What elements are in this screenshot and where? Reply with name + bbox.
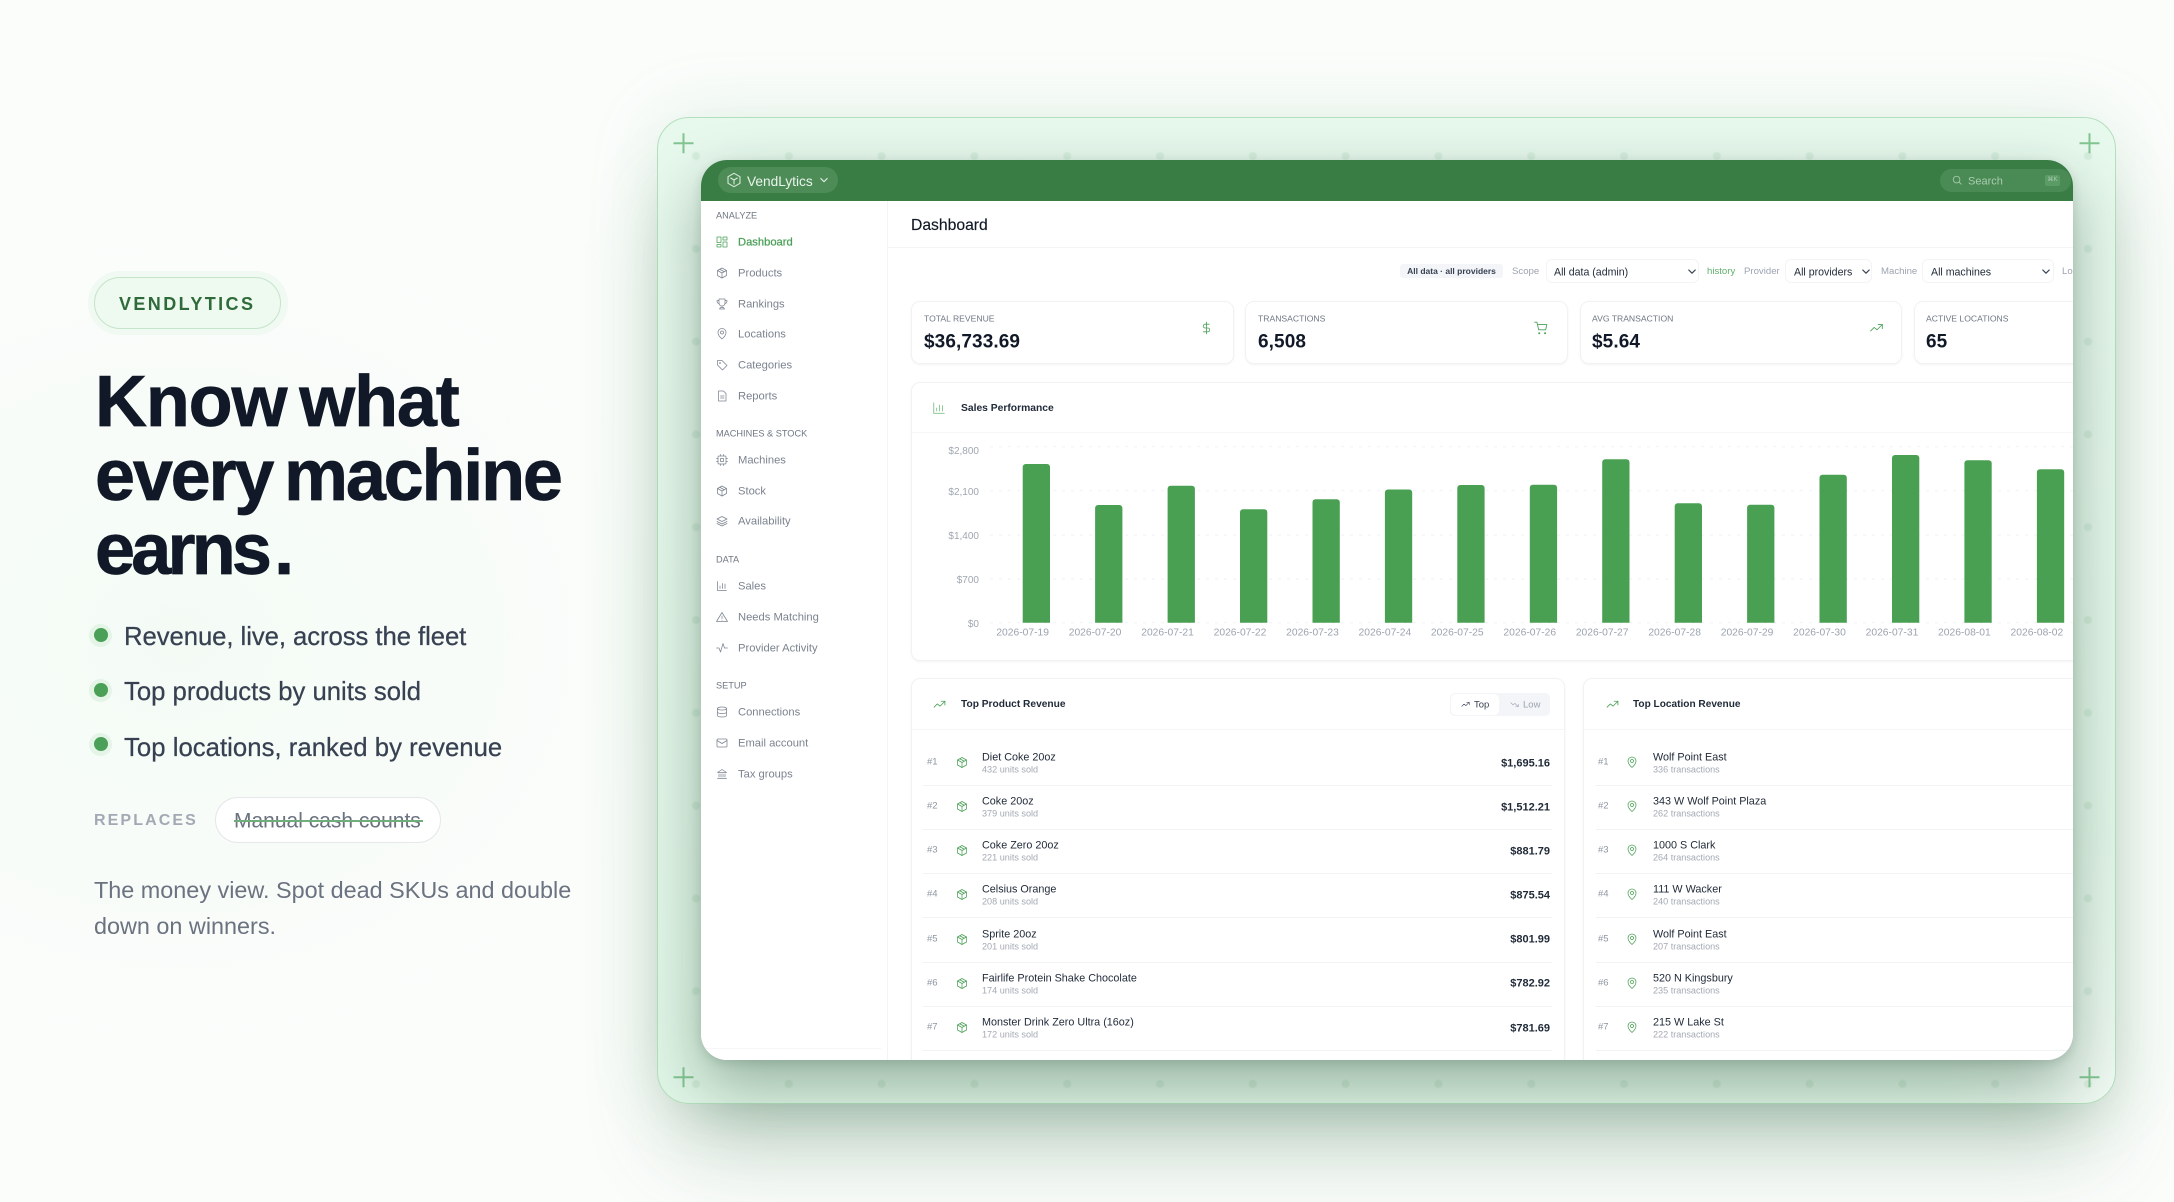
location row 6: 520 N Kingsbury <box>1653 972 1733 984</box>
panel: app window <box>701 160 2073 1060</box>
bar chart: $2,800 <box>948 446 979 457</box>
bar chart: 2026-07-22 <box>1214 628 1267 638</box>
product row 5: 201 units sold <box>982 941 1038 951</box>
KPI: transactions: TRANSACTIONS <box>1258 314 1325 324</box>
icon: trend <box>1606 700 1618 708</box>
nav section: data: Provider Activity <box>738 642 818 654</box>
bar chart: 2026-08-01 <box>1938 628 1991 638</box>
scope chip: All data · all providers <box>1407 266 1496 276</box>
nav section: analyze: Products <box>738 267 782 279</box>
panel: top product revenue <box>911 678 1565 1098</box>
filter bar: Scope <box>1512 266 1539 277</box>
bar chart: 2026-07-19 <box>996 628 1049 638</box>
description <box>94 877 571 939</box>
replaces pill <box>215 797 441 843</box>
product row 6: #6 <box>927 977 938 988</box>
product row 4 <box>923 873 1552 918</box>
panel: top product revenue: Top Product Revenue <box>961 698 1066 709</box>
badge: VENDLYTICS: VENDLYTICS <box>119 294 255 314</box>
location row 3: 1000 S Clark <box>1653 840 1715 852</box>
product row 4: 208 units sold <box>982 897 1038 907</box>
product row 7: Monster Drink Zero Ultra (16oz) <box>982 1017 1134 1029</box>
bar chart: $0 <box>968 619 979 630</box>
dot grid pattern <box>692 152 2092 1088</box>
icon: trend <box>934 700 946 708</box>
location row 2 <box>1596 785 2174 830</box>
location row 7 <box>1596 1006 2174 1051</box>
product row 1: $1,695.16 <box>1501 757 1550 769</box>
nav section: setup: Tax groups <box>738 768 793 780</box>
nav section: setup: Email account <box>738 737 808 749</box>
nav section: data: DATA <box>716 554 739 564</box>
bar chart: 2026-07-21 <box>1141 628 1194 638</box>
product row 6: Fairlife Protein Shake Chocolate <box>982 972 1137 984</box>
nav section: analyze: ANALYZE <box>716 210 757 220</box>
nav section: machines and stock <box>716 428 807 527</box>
product row 4: #4 <box>927 889 938 900</box>
bar chart: 2026-07-25 <box>1431 628 1484 638</box>
location row 4: #4 <box>1598 889 1609 900</box>
headline: Know what <box>95 362 459 442</box>
headline: every machine <box>95 436 561 516</box>
bar chart <box>948 446 2073 638</box>
location row 3 <box>1596 829 2174 874</box>
KPI: total revenue <box>911 301 1234 364</box>
description: down on winners. <box>94 913 276 939</box>
KPI: transactions: 6,508 <box>1258 332 1306 352</box>
nav section: analyze <box>716 210 793 402</box>
location row 4: 240 transactions <box>1653 897 1720 907</box>
location row 2: 343 W Wolf Point Plaza <box>1653 796 1766 808</box>
toggle: top / low: Low <box>1523 699 1540 710</box>
location row 6: #6 <box>1598 977 1609 988</box>
KPI: avg transaction <box>1580 301 1902 364</box>
nav section: setup: Connections <box>738 706 800 718</box>
bar chart: 2026-07-23 <box>1286 628 1339 638</box>
replaces label: REPLACES <box>94 812 198 829</box>
location row 5: 207 transactions <box>1653 941 1720 951</box>
product row 1 <box>923 741 1552 786</box>
bar chart: 2026-07-28 <box>1648 628 1701 638</box>
panel: sales performance: Sales Performance <box>961 402 1054 413</box>
bar chart: 2026-07-24 <box>1359 628 1411 638</box>
nav section: machines and stock: MACHINES & STOCK <box>716 428 807 438</box>
location row 5: Wolf Point East <box>1653 928 1727 940</box>
KPI: avg transaction: $5.64 <box>1592 332 1640 352</box>
scope chip <box>1400 264 1503 278</box>
location row 7: 222 transactions <box>1653 1029 1720 1039</box>
product row 6: 174 units sold <box>982 985 1038 995</box>
bullet: locations: Top locations, ranked by revenue <box>124 735 502 763</box>
product row 7 <box>923 1006 1552 1051</box>
bar chart: $2,100 <box>948 487 979 498</box>
product row 7: $781.69 <box>1510 1022 1550 1034</box>
description: The money view. Spot dead SKUs and double <box>94 877 571 903</box>
product row 3: Coke Zero 20oz <box>982 840 1059 852</box>
search box: ⌘K <box>2047 177 2058 183</box>
KPI: avg transaction: AVG TRANSACTION <box>1592 314 1673 324</box>
filter bar: history <box>1707 266 1735 277</box>
filter bar: Machine <box>1881 266 1917 277</box>
icon: bar chart <box>933 402 945 414</box>
nav section: machines and stock: Availability <box>738 515 791 527</box>
toggle: top / low: Top <box>1474 699 1489 710</box>
panel: showcase frame <box>657 117 2116 1104</box>
KPI: active locations <box>1914 301 2174 364</box>
product row 7: #7 <box>927 1021 938 1032</box>
bar chart: 2026-07-27 <box>1576 628 1629 638</box>
page title: Dashboard <box>911 217 988 234</box>
location row 2: #2 <box>1598 800 1609 811</box>
headline: earns. <box>95 510 290 590</box>
product row 6: $782.92 <box>1510 978 1550 990</box>
bullet: products: Top products by units sold <box>124 679 421 707</box>
product row 5: #5 <box>927 933 938 944</box>
location row 1: #1 <box>1598 756 1609 767</box>
product row 2 <box>923 785 1552 830</box>
KPI: total revenue: TOTAL REVENUE <box>924 314 995 324</box>
nav section: data <box>716 554 819 654</box>
headline <box>95 362 561 590</box>
product row 1: 432 units sold <box>982 764 1038 774</box>
toggle: top / low <box>1450 693 1550 716</box>
nav section: data: Needs Matching <box>738 611 819 623</box>
filter bar <box>1400 259 2073 283</box>
bar chart: 2026-08-02 <box>2011 628 2063 638</box>
nav section: setup <box>716 680 808 780</box>
bullet: revenue: Revenue, live, across the fleet <box>124 624 466 652</box>
filter bar: All data (admin) <box>1554 267 1628 279</box>
filter bar: Lo <box>2062 266 2073 277</box>
location row 1 <box>1596 741 2174 786</box>
nav section: analyze: Categories <box>738 359 792 371</box>
brand pill: VendLytics <box>747 174 813 189</box>
location row 5: #5 <box>1598 933 1609 944</box>
location row 4 <box>1596 873 2174 918</box>
product row 5: Sprite 20oz <box>982 928 1037 940</box>
location row 6 <box>1596 962 2174 1007</box>
location row 7: 215 W Lake St <box>1653 1017 1724 1029</box>
location row 2: 262 transactions <box>1653 808 1720 818</box>
nav section: setup: SETUP <box>716 680 747 690</box>
bar chart: 2026-07-20 <box>1069 628 1122 638</box>
location row 3: #3 <box>1598 844 1609 855</box>
bar chart: $1,400 <box>948 531 979 542</box>
product row 6 <box>923 962 1552 1007</box>
panel: top location revenue <box>1583 678 2174 1098</box>
filter bar: All machines <box>1931 267 1991 279</box>
product row 2: $1,512.21 <box>1501 801 1550 813</box>
location row 6: 235 transactions <box>1653 985 1720 995</box>
nav section: machines and stock: Stock <box>738 485 766 497</box>
product row 3: #3 <box>927 844 938 855</box>
product row 3 <box>923 829 1552 874</box>
search box: Search <box>1968 175 2003 187</box>
location row 4: 111 W Wacker <box>1653 884 1722 896</box>
bullet list <box>89 624 502 763</box>
product row 3: 221 units sold <box>982 852 1038 862</box>
nav section: machines and stock: Machines <box>738 454 786 466</box>
product row 1: #1 <box>927 756 938 767</box>
filter bar: Provider <box>1744 266 1780 277</box>
bar chart: 2026-07-26 <box>1503 628 1556 638</box>
brand pill <box>718 167 838 193</box>
nav section: analyze: Reports <box>738 390 777 402</box>
KPI: active locations: ACTIVE LOCATIONS <box>1926 314 2008 324</box>
product row 7: 172 units sold <box>982 1029 1038 1039</box>
bar chart: 2026-07-31 <box>1866 628 1919 638</box>
product row 3: $881.79 <box>1510 845 1550 857</box>
product row 5 <box>923 918 1552 963</box>
bar chart: $700 <box>957 575 979 586</box>
location row 3: 264 transactions <box>1653 852 1720 862</box>
nav section: analyze: Locations <box>738 328 786 340</box>
location row 1: Wolf Point East <box>1653 752 1727 764</box>
search box <box>1940 169 2071 192</box>
product row 5: $801.99 <box>1510 934 1550 946</box>
KPI: active locations: 65 <box>1926 332 1947 352</box>
nav section: data: Sales <box>738 580 766 592</box>
location row 7: #7 <box>1598 1021 1609 1032</box>
KPI: transactions <box>1245 301 1568 364</box>
bar chart: 2026-07-29 <box>1721 628 1774 638</box>
nav section: analyze: Rankings <box>738 298 785 310</box>
filter bar: All providers <box>1794 267 1852 279</box>
KPI: total revenue: $36,733.69 <box>924 332 1020 352</box>
panel: sales performance <box>911 382 2174 661</box>
nav section: analyze: Dashboard <box>738 236 793 248</box>
product row 2: 379 units sold <box>982 808 1038 818</box>
product row 2: Coke 20oz <box>982 796 1034 808</box>
location row 5 <box>1596 918 2174 963</box>
product row 1: Diet Coke 20oz <box>982 752 1056 764</box>
replaces pill: Manual cash counts <box>234 810 421 832</box>
corner plus markers <box>674 133 2100 1088</box>
product row 2: #2 <box>927 800 938 811</box>
badge: VENDLYTICS <box>88 271 288 335</box>
header bar <box>701 160 2073 201</box>
product row 4: Celsius Orange <box>982 884 1056 896</box>
bar chart: 2026-07-30 <box>1793 628 1846 638</box>
location row 1: 336 transactions <box>1653 764 1720 774</box>
panel: sidebar <box>701 201 888 1060</box>
panel: top location revenue: Top Location Revenue <box>1633 698 1740 709</box>
product row 4: $875.54 <box>1510 889 1550 901</box>
icon: logo <box>727 172 741 188</box>
